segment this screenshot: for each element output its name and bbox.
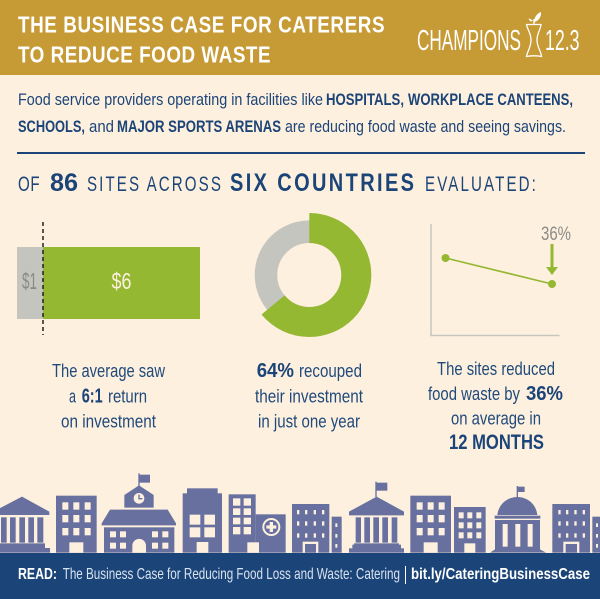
donut chart: 64% <box>262 228 356 322</box>
caption: recouped investment: in just one year <box>258 410 360 432</box>
caption: return on investment: a <box>69 386 76 406</box>
subheading <box>18 169 536 197</box>
caption: recouped investment: recouped <box>299 360 362 381</box>
intro paragraph: Food service providers operating in facilities like <box>18 91 323 109</box>
line chart: 36% reduction: 36% <box>541 223 571 245</box>
building: small office <box>454 507 486 553</box>
building: hospital <box>229 494 286 553</box>
caption: return on investment: 6:1 <box>82 384 103 408</box>
logo: Champions 12.3: CHAMPIONS <box>417 25 521 57</box>
title: TO REDUCE FOOD WASTE <box>18 43 271 68</box>
caption: return on investment: return <box>108 386 147 406</box>
caption: recouped investment: their investment <box>255 386 363 406</box>
intro paragraph: HOSPITALS, <box>326 91 404 109</box>
caption: reduced food waste: 12 MONTHS <box>449 431 544 454</box>
line chart: 36% reduction <box>431 223 571 336</box>
subheading: EVALUATED: <box>425 171 536 196</box>
building: school <box>102 473 176 553</box>
header band <box>0 0 600 75</box>
bar chart: 6:1 return: $1 <box>22 268 37 294</box>
intro paragraph: MAJOR SPORTS ARENAS <box>117 118 281 136</box>
building: tower block <box>183 488 222 553</box>
arrow <box>546 244 558 275</box>
bar chart: 6:1 return: $6 <box>112 268 132 294</box>
building: apartments left <box>292 504 342 553</box>
logo: Champions 12.3 <box>417 12 580 57</box>
subheading: OF <box>18 171 40 196</box>
caption: reduced food waste: 36% <box>526 382 563 405</box>
subheading: 86 <box>50 169 78 197</box>
building: domed capitol <box>490 486 546 553</box>
caption: return on investment: on investment <box>61 410 156 432</box>
intro paragraph: SCHOOLS, <box>18 118 85 136</box>
icon: apple core <box>526 12 542 56</box>
caption: return on investment: The average saw <box>52 360 166 381</box>
building: apartments right <box>552 504 600 553</box>
caption: reduced food waste: food waste by <box>428 383 521 404</box>
subheading: SITES ACROSS <box>87 171 221 196</box>
caption: reduced food waste: on average in <box>451 408 541 428</box>
footer band: READ: <box>18 566 57 583</box>
building: bank centre <box>349 482 404 553</box>
intro paragraph <box>18 91 573 136</box>
caption: recouped investment: 64% <box>257 359 294 382</box>
building: office <box>56 496 97 553</box>
title <box>18 13 385 68</box>
footer band <box>0 553 600 599</box>
logo: Champions 12.3: 12.3 <box>545 25 580 57</box>
bar chart: 6:1 return <box>17 222 200 335</box>
city skyline <box>0 473 600 553</box>
footer band: The Business Case for Reducing Food Loss and Waste: Catering <box>63 566 400 583</box>
building: bank left <box>0 497 50 553</box>
title: THE BUSINESS CASE FOR CATERERS <box>18 13 385 38</box>
building: office right <box>410 496 451 553</box>
caption: reduced food waste: The sites reduced <box>437 358 555 379</box>
intro paragraph: and <box>89 118 114 136</box>
caption: recouped investment <box>255 359 363 432</box>
subheading: SIX COUNTRIES <box>230 169 414 197</box>
caption: return on investment <box>52 360 166 432</box>
caption: reduced food waste <box>428 358 563 454</box>
